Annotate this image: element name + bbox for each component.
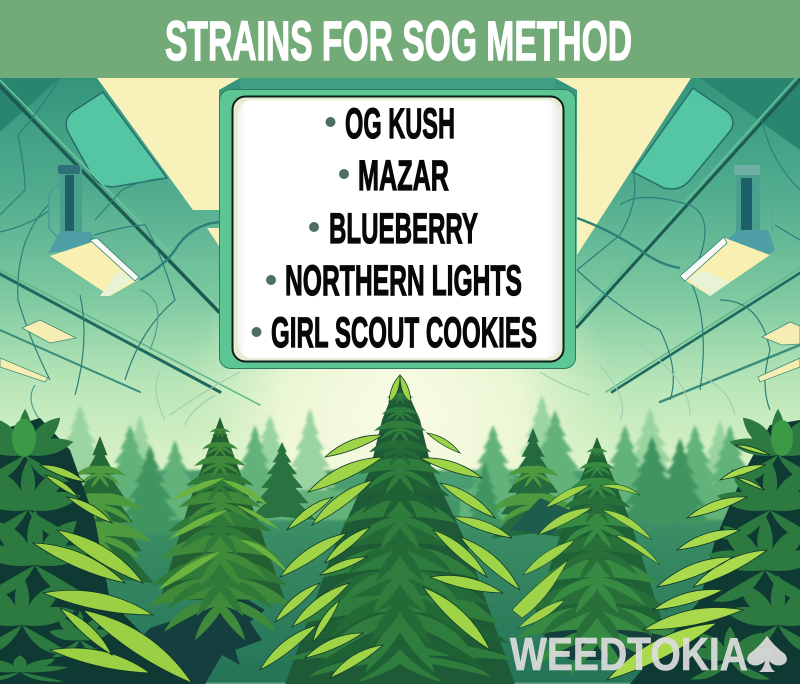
plant: mid-left bbox=[147, 417, 293, 640]
ceiling beams bbox=[0, 74, 800, 405]
right grow lamp bbox=[680, 165, 775, 296]
ceiling light panel: lower-left sliver bbox=[207, 228, 219, 246]
header bar bbox=[0, 0, 800, 78]
watermark logo: WEEDTOKIA bbox=[510, 628, 748, 680]
bullet: Blueberry bbox=[309, 205, 478, 253]
strain list panel bbox=[220, 90, 576, 368]
bullet: Mazar bbox=[339, 152, 449, 200]
bullet: Northern Lights: NORTHERN LIGHTS bbox=[285, 257, 522, 305]
bullet: Blueberry: BLUEBERRY bbox=[329, 205, 478, 253]
background forest bbox=[0, 395, 800, 684]
distant plant: left bbox=[46, 436, 154, 583]
icon: spade bbox=[747, 636, 787, 672]
plant: right foreground bbox=[607, 409, 800, 684]
ceiling strip between panels bbox=[240, 78, 555, 90]
distant plant: centre-left bbox=[248, 442, 316, 520]
bullet: Girl Scout Cookies bbox=[252, 309, 537, 357]
plant: left foreground bbox=[0, 409, 192, 684]
small distant lights bbox=[0, 320, 800, 382]
teal housing: left bbox=[66, 92, 167, 187]
ceiling light panel: right bbox=[555, 78, 691, 255]
faint lower wires bbox=[156, 345, 735, 425]
hanging wires bbox=[0, 78, 800, 420]
ceiling light panel: left bbox=[97, 78, 240, 210]
bullet: OG Kush bbox=[326, 100, 455, 148]
distant plant: centre-right bbox=[491, 428, 575, 538]
bullet: Mazar: MAZAR bbox=[358, 152, 449, 200]
left grow lamp bbox=[48, 165, 139, 296]
bullet: Girl Scout Cookies: GIRL SCOUT COOKIES bbox=[271, 309, 537, 357]
plant: mid-right bbox=[512, 437, 678, 676]
plant: centre foreground bbox=[260, 375, 520, 684]
shadows on floor bbox=[120, 498, 665, 684]
bullet: Northern Lights bbox=[266, 257, 522, 305]
teal housing: right bbox=[633, 88, 733, 189]
bullet: OG Kush: OG KUSH bbox=[345, 100, 455, 148]
